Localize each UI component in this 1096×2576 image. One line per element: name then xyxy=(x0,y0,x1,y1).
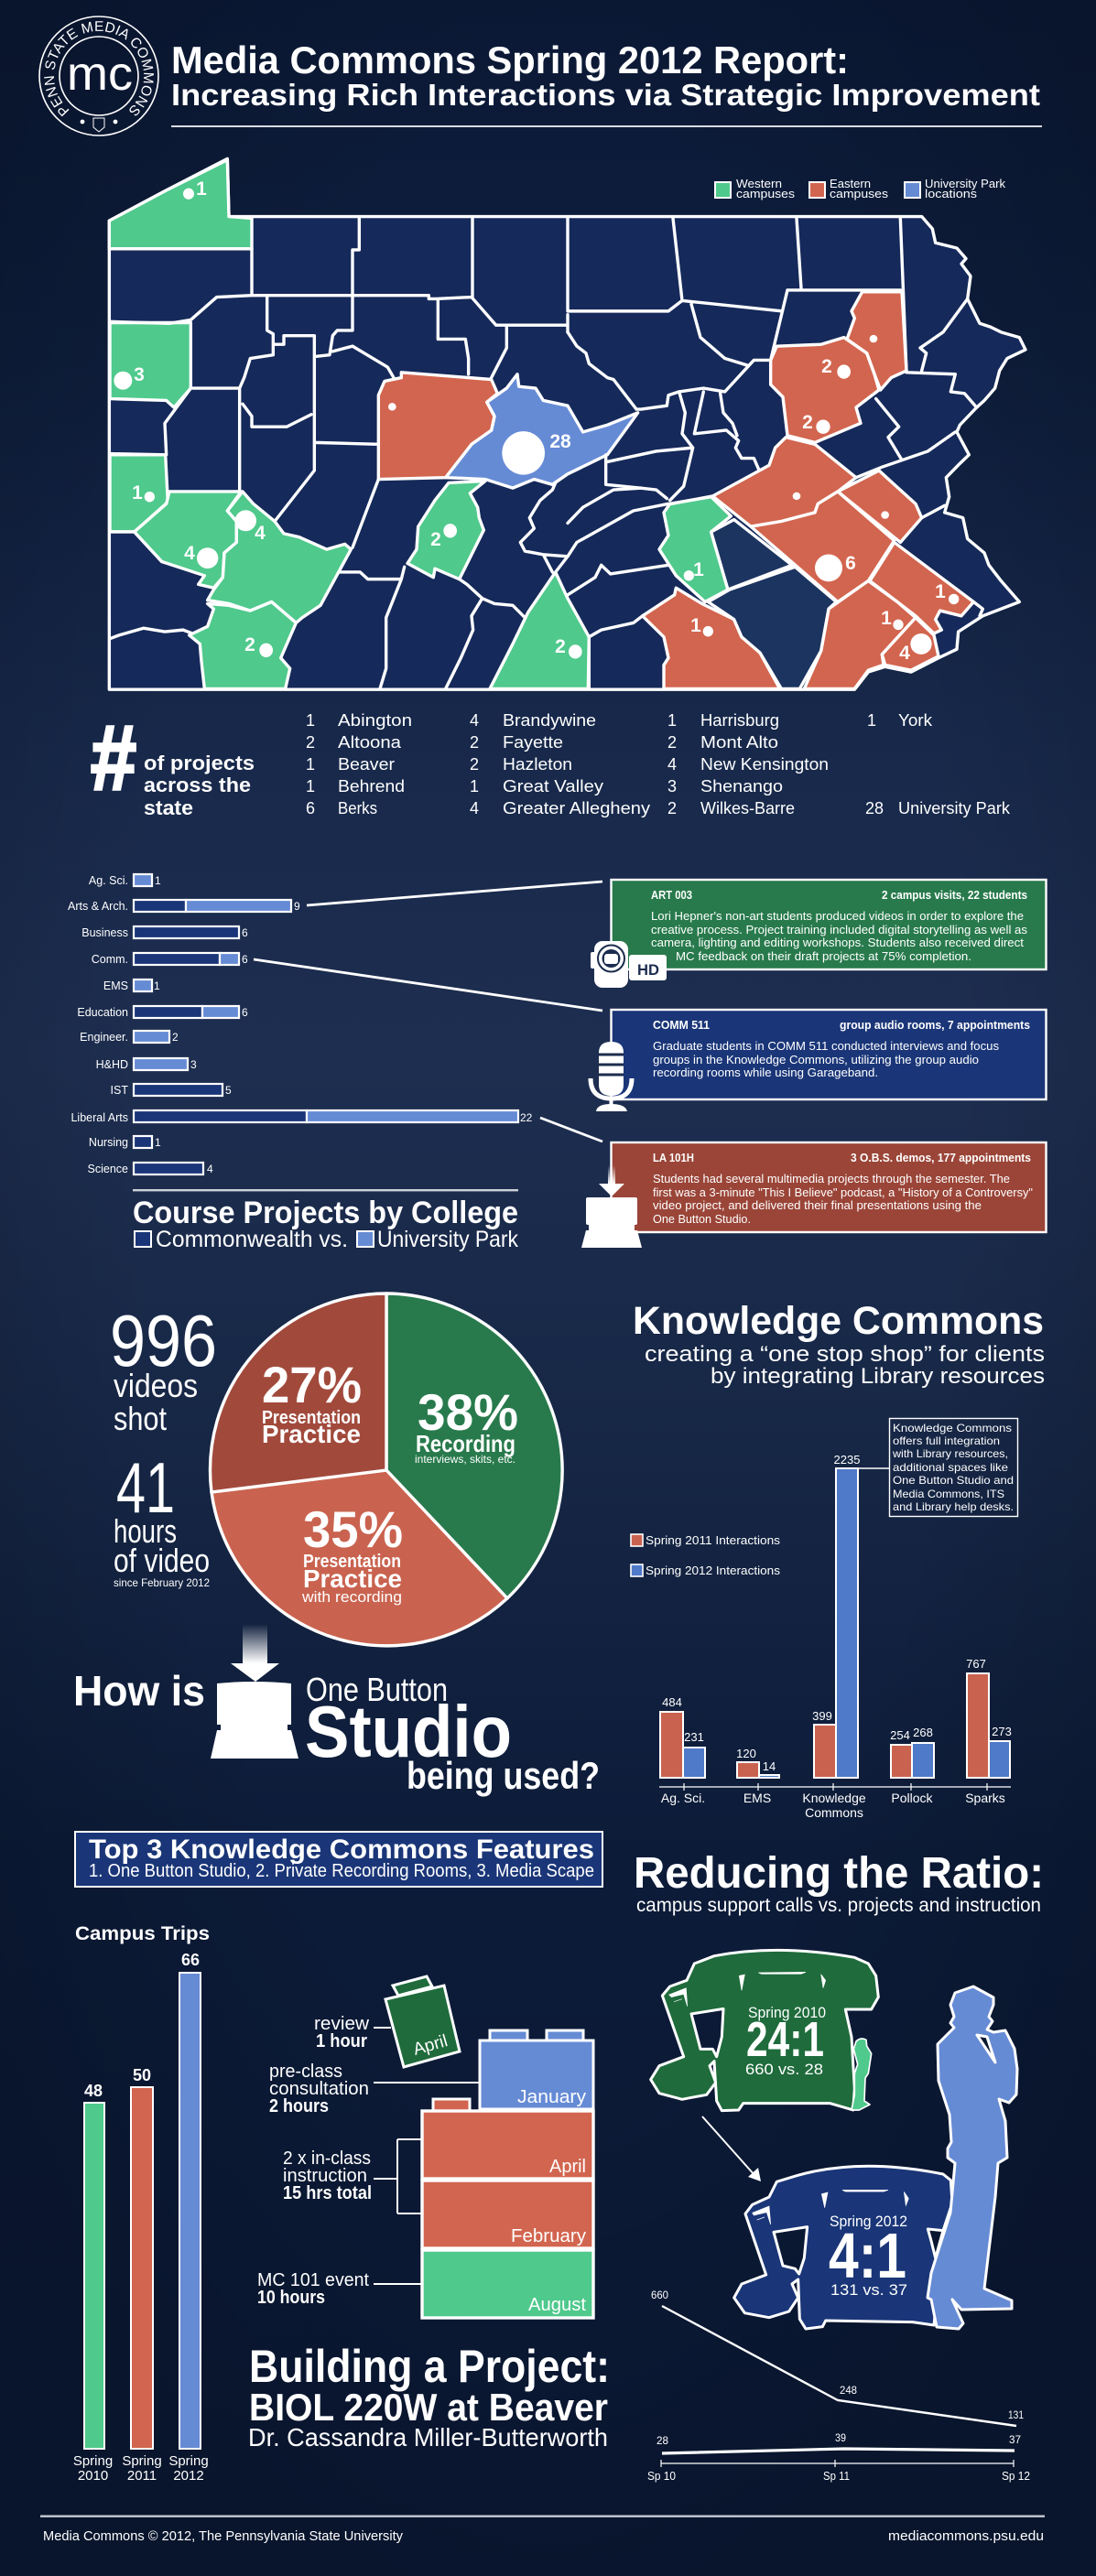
map project counts: 6 xyxy=(845,553,856,574)
panel: COMM 511: groups in the Knowledge Commons, utilizing the group audio xyxy=(653,1053,979,1066)
heading: knowledge commons: Knowledge Commons xyxy=(633,1299,1044,1343)
April block: April xyxy=(549,2157,586,2177)
campus project list: Hazleton xyxy=(503,755,572,774)
heading: building a project: BIOL 220W at Beaver xyxy=(249,2386,608,2429)
panel: COMM 511 xyxy=(612,1010,1046,1099)
diagram: project building blocks xyxy=(257,1976,593,2318)
bar chart: course projects by college: 2 xyxy=(172,1031,179,1044)
panel: ART 003: 2 campus visits, 22 students xyxy=(882,888,1027,902)
map project counts: 2 xyxy=(821,356,832,377)
heading: knowledge commons: creating a “one stop shop” for clients xyxy=(645,1342,1045,1367)
icon: Spring 2012 telephone: 131 vs. 37 xyxy=(830,2281,907,2299)
chart: campus trips: 66 xyxy=(181,1951,200,1969)
campus project list: Behrend xyxy=(338,777,405,796)
bar chart: course projects by college: 6 xyxy=(242,953,248,966)
panel: COMM 511: recording rooms while using Garageband. xyxy=(653,1066,878,1079)
pie chart: one button studio usage: 27% xyxy=(262,1356,362,1413)
chart: campus trips: 2011 xyxy=(127,2468,157,2484)
stats: videos shot and hours of video: shot xyxy=(114,1400,167,1437)
bar chart: library interactions xyxy=(659,1453,1012,1820)
panel: top 3 knowledge commons features xyxy=(75,1832,602,1887)
block labels: pre-class xyxy=(269,2062,342,2082)
bar chart: course projects by college: 6 xyxy=(242,926,248,939)
callout: knowledge commons integration: Media Commons, ITS xyxy=(893,1488,1004,1500)
map legend: University Park xyxy=(925,178,1006,190)
line chart: calls vs projects and instruction: 131 xyxy=(1008,2408,1024,2421)
chart legend: interactions: Spring 2011 Interactions xyxy=(646,1534,780,1547)
icon: Spring 2010 telephone xyxy=(651,1950,878,2111)
campus project list: York xyxy=(898,711,933,730)
block labels: review xyxy=(314,2014,370,2034)
map project counts: 28 xyxy=(549,431,571,452)
campus project list: Abington xyxy=(338,711,412,730)
panel: top 3 knowledge commons features: 1. One Button Studio, 2. Private Recording Rooms, 3. Media Scape xyxy=(89,1861,594,1881)
map project counts: 1 xyxy=(132,482,143,503)
campus project list: Berks xyxy=(338,799,377,817)
bar chart: library interactions: Ag. Sci. xyxy=(661,1791,705,1805)
campus project list: 1 xyxy=(306,777,315,796)
January block xyxy=(480,2030,593,2109)
map legend: Western xyxy=(736,178,782,190)
block labels: 2 hours xyxy=(269,2096,329,2116)
callout: knowledge commons integration: additional spaces like xyxy=(893,1461,1008,1474)
chart: campus trips: Spring xyxy=(122,2453,162,2469)
campus project list: Brandywine xyxy=(503,711,596,730)
campus project list: 4 xyxy=(470,711,479,730)
pie chart: one button studio usage xyxy=(211,1293,562,1646)
campus project list: 2 xyxy=(470,755,479,774)
bar chart: course projects by college: Engineer. xyxy=(80,1031,128,1044)
callout: knowledge commons integration: with Library resources, xyxy=(892,1447,1008,1460)
bar chart: course projects by college: Nursing xyxy=(89,1136,128,1149)
callout: knowledge commons integration: offers full integration xyxy=(893,1434,1000,1447)
bar chart: library interactions: EMS xyxy=(743,1791,771,1805)
pie chart: one button studio usage: Recording xyxy=(416,1430,515,1457)
stats: videos shot and hours of video: videos xyxy=(114,1367,198,1404)
map project counts: 2 xyxy=(244,634,255,655)
icon: Spring 2012 telephone: Spring 2012 xyxy=(830,2213,907,2230)
bar chart: library interactions: 484 xyxy=(662,1695,682,1709)
bar chart: library interactions: 120 xyxy=(736,1747,756,1760)
heading: building a project xyxy=(248,2341,610,2452)
eastern county lines xyxy=(568,218,982,688)
icon: Spring 2012 telephone: 4:1 xyxy=(829,2220,906,2291)
stats: videos shot and hours of video: since February 2012 xyxy=(114,1576,210,1589)
map: Pennsylvania counties with project counts xyxy=(109,158,1025,689)
callout: knowledge commons integration: One Button Studio and xyxy=(893,1474,1014,1487)
map project counts: 4 xyxy=(255,523,266,544)
icon: one button studio small xyxy=(581,1165,642,1248)
callout: knowledge commons integration: Knowledge Commons xyxy=(893,1422,1012,1434)
bar chart: course projects by college: 1 xyxy=(155,874,161,887)
footer: Media Commons © 2012, The Pennsylvania State University xyxy=(43,2528,403,2544)
block labels: instruction xyxy=(283,2166,367,2186)
bar chart: library interactions: 14 xyxy=(763,1759,776,1773)
map project counts: 1 xyxy=(935,581,946,602)
bar chart: course projects by college: IST xyxy=(111,1084,128,1097)
line chart: calls vs projects and instruction: Sp 12 xyxy=(1002,2469,1030,2483)
logo: Penn State Media Commons seal: PENN STATE MEDIA COMMONS xyxy=(44,21,154,117)
bar chart: course projects by college: Science xyxy=(88,1163,128,1175)
pie chart: one button studio usage: Presentation xyxy=(303,1552,401,1572)
line chart: calls vs projects and instruction: 39 xyxy=(835,2431,846,2444)
Behrend-side eastern county xyxy=(378,373,497,480)
pie chart: one button studio usage: Practice xyxy=(303,1564,402,1593)
bar chart: course projects by college: Liberal Arts xyxy=(71,1111,128,1124)
line chart: calls vs projects and instruction xyxy=(647,2289,1030,2483)
bar chart: course projects by college: 6 xyxy=(242,1006,248,1019)
stats: videos shot and hours of video xyxy=(110,1300,217,1589)
bar chart: library interactions: 767 xyxy=(966,1657,986,1671)
campus project list: 28 xyxy=(865,799,884,817)
campus project list: New Kensington xyxy=(700,755,829,774)
panel: COMM 511: COMM 511 xyxy=(653,1018,710,1032)
pie chart: one button studio usage: interviews, skits, etc. xyxy=(415,1453,515,1466)
bar chart: course projects by college: 5 xyxy=(225,1084,232,1097)
bar chart: course projects by college: 1 xyxy=(154,980,160,992)
chart: campus trips: Spring xyxy=(73,2453,113,2469)
state outline xyxy=(109,158,1025,689)
icon: small person silhouette xyxy=(852,2039,872,2110)
campus markers xyxy=(114,189,959,659)
bar chart: library interactions: 399 xyxy=(812,1709,832,1723)
campus project list: Wilkes-Barre xyxy=(700,799,795,817)
pie chart: one button studio usage: Presentation xyxy=(262,1408,361,1428)
heading: building a project: Dr. Cassandra Miller-Butterworth xyxy=(248,2423,608,2452)
bar chart: course projects by college: 22 xyxy=(520,1111,533,1124)
bar chart: library interactions: Knowledge xyxy=(802,1791,866,1805)
panel: LA 101H: LA 101H xyxy=(653,1151,694,1164)
line chart: calls vs projects and instruction: Sp 11 xyxy=(823,2469,850,2483)
callout: knowledge commons integration xyxy=(856,1419,1018,1516)
campus project list: 2 xyxy=(306,733,315,752)
map project counts: 4 xyxy=(184,543,195,564)
panel: ART 003: camera, lighting and editing workshops. Students also received direct xyxy=(651,936,1024,949)
heading: # of projects across the state: state xyxy=(144,796,193,819)
chart: campus trips: Campus Trips xyxy=(75,1923,210,1944)
map legend xyxy=(715,178,1006,200)
heading: how is one button studio being used: How is xyxy=(73,1667,205,1715)
April review block xyxy=(385,1976,460,2067)
heading: course projects by college xyxy=(133,1189,518,1252)
bar chart: course projects by college: Business xyxy=(81,926,128,939)
line chart: calls vs projects and instruction: 37 xyxy=(1009,2433,1021,2446)
panel: ART 003 xyxy=(612,880,1046,969)
bar chart: course projects by college: 3 xyxy=(190,1058,197,1071)
panel: COMM 511: group audio rooms, 7 appointments xyxy=(840,1018,1030,1032)
heading: course projects by college: Course Projects by College xyxy=(133,1196,518,1230)
bar chart: library interactions: 231 xyxy=(684,1730,704,1744)
heading: # of projects across the state: of projects xyxy=(144,752,255,774)
icon: Spring 2012 telephone xyxy=(734,2166,952,2329)
heading: how is one button studio being used xyxy=(73,1624,600,1797)
icon: HD camera: HD xyxy=(637,961,659,979)
map project counts: 2 xyxy=(802,412,813,433)
campus project list: Greater Allegheny xyxy=(503,799,650,817)
campus project list: University Park xyxy=(898,799,1011,817)
chart: campus trips: 48 xyxy=(84,2082,103,2100)
heading: how is one button studio being used: One Button xyxy=(306,1671,448,1708)
block labels xyxy=(257,2014,479,2308)
map legend: Eastern xyxy=(830,178,871,190)
campus project list: Shenango xyxy=(700,777,783,796)
chart: campus trips xyxy=(73,1923,210,2484)
footer: mediacommons.psu.edu xyxy=(888,2528,1044,2544)
map project counts: 2 xyxy=(430,529,441,550)
map project counts xyxy=(132,179,946,664)
panel: LA 101H xyxy=(612,1142,1046,1232)
heading: # of projects across the state: across the xyxy=(144,774,251,796)
panel: LA 101H: first was a 3-minute "This I Believe" podcast, a "History of a Controversy" xyxy=(653,1185,1033,1199)
campus project list: Altoona xyxy=(338,733,402,752)
block labels: 10 hours xyxy=(257,2288,325,2308)
map project counts: 1 xyxy=(693,559,704,580)
bar chart: course projects by college: Arts & Arch. xyxy=(68,900,128,913)
campus project list: 6 xyxy=(306,799,315,817)
bar chart: course projects by college: H&HD xyxy=(96,1058,128,1071)
campus project list: 1 xyxy=(306,755,315,774)
campus project list: Beaver xyxy=(338,755,395,774)
map project counts: 2 xyxy=(555,636,566,657)
western campus counties xyxy=(109,160,589,688)
line chart: calls vs projects and instruction: 28 xyxy=(657,2434,668,2447)
heading: knowledge commons: by integrating Library resources xyxy=(711,1364,1045,1389)
Cumberland area county xyxy=(659,497,731,602)
title: Increasing Rich Interactions via Strategic Improvement xyxy=(171,78,1040,112)
panel: ART 003: ART 003 xyxy=(651,888,692,902)
heading: how is one button studio being used: being used? xyxy=(407,1754,600,1797)
title: Media Commons Spring 2012 Report: xyxy=(171,38,849,81)
January block: January xyxy=(517,2087,586,2107)
western county lines xyxy=(110,218,568,688)
University Park county xyxy=(446,374,638,488)
campus project list: 4 xyxy=(667,755,677,774)
bar chart: course projects by college: Ag. Sci. xyxy=(89,874,128,887)
heading: building a project: Building a Project: xyxy=(249,2341,610,2392)
arrow between telephones xyxy=(702,2116,761,2181)
bar chart: course projects by college: Education xyxy=(77,1006,128,1019)
map project counts: 4 xyxy=(899,643,910,664)
stats: videos shot and hours of video: 996 xyxy=(110,1300,217,1381)
April review block: April xyxy=(411,2031,450,2060)
bar chart: library interactions: 268 xyxy=(913,1726,933,1739)
icon: Spring 2010 telephone: Spring 2010 xyxy=(748,2004,826,2021)
campus project list xyxy=(306,711,1011,817)
block labels: MC 101 event xyxy=(257,2270,369,2290)
February block xyxy=(422,2181,593,2248)
chart legend: interactions: Spring 2012 Interactions xyxy=(646,1564,780,1577)
campus project list: 2 xyxy=(470,733,479,752)
April block xyxy=(422,2099,593,2179)
campus project list: Harrisburg xyxy=(700,711,779,730)
bar chart: course projects by college xyxy=(68,874,533,1175)
heading: reducing the ratio: campus support calls vs. projects and instruction xyxy=(636,1895,1041,1916)
panel: LA 101H: video project, and delivered their final presentations using the xyxy=(653,1198,982,1212)
stats: videos shot and hours of video: hours xyxy=(114,1512,177,1550)
icon: HD camera xyxy=(591,941,667,988)
callout: knowledge commons integration: and Library help desks. xyxy=(893,1500,1014,1513)
stats: videos shot and hours of video: 41 xyxy=(116,1447,175,1528)
heading: reducing the ratio: Reducing the Ratio: xyxy=(634,1849,1044,1898)
line chart: calls vs projects and instruction: Sp 10 xyxy=(647,2469,676,2483)
heading: knowledge commons xyxy=(633,1299,1045,1389)
bar chart: course projects by college: 1 xyxy=(155,1136,161,1149)
panel: COMM 511: Graduate students in COMM 511 conducted interviews and focus xyxy=(653,1039,999,1053)
title xyxy=(171,38,1042,127)
panel: LA 101H: 3 O.B.S. demos, 177 appointments xyxy=(851,1151,1031,1164)
campus project list: Mont Alto xyxy=(700,733,778,752)
stats: videos shot and hours of video: of video xyxy=(114,1542,210,1579)
bar chart: library interactions: Pollock xyxy=(891,1791,934,1805)
icon: large person silhouette xyxy=(928,1986,1017,2329)
chart: campus trips: 2010 xyxy=(78,2468,108,2484)
pie chart: one button studio usage: 38% xyxy=(418,1383,518,1441)
heading: how is one button studio being used: Studio xyxy=(305,1691,512,1772)
bar chart: course projects by college: 4 xyxy=(207,1163,213,1175)
heading: # of projects across the state: # xyxy=(91,707,136,809)
icon: Spring 2010 telephone: 24:1 xyxy=(746,2012,824,2067)
pie chart: one button studio usage: with recording xyxy=(301,1588,402,1606)
campus project list: 2 xyxy=(667,733,677,752)
chart legend: interactions xyxy=(631,1534,780,1577)
panel: ART 003: MC feedback on their draft projects at 75% completion. xyxy=(676,949,971,963)
bar chart: library interactions: 2235 xyxy=(834,1453,860,1467)
bar chart: course projects by college: 9 xyxy=(294,900,300,913)
map project counts: 1 xyxy=(881,608,892,629)
map legend: campuses xyxy=(736,188,795,200)
August block xyxy=(422,2250,593,2318)
pie chart: one button studio usage: 35% xyxy=(303,1500,403,1558)
panel: LA 101H: Students had several multimedia projects through the semester. The xyxy=(653,1172,1010,1185)
campus project list: Great Valley xyxy=(503,777,603,796)
panel: LA 101H: One Button Studio. xyxy=(653,1212,751,1226)
map legend: campuses xyxy=(830,188,888,200)
map legend: locations xyxy=(925,188,977,200)
icon: Spring 2010 telephone: 660 vs. 28 xyxy=(745,2061,823,2078)
campus project list: 1 xyxy=(306,711,315,730)
panel: ART 003: creative process. Project training included digital storytelling as well as xyxy=(651,923,1028,936)
icon: microphone xyxy=(591,1042,632,1111)
bar chart: library interactions: 273 xyxy=(992,1725,1012,1738)
lighter southern counties xyxy=(708,520,836,688)
August block: August xyxy=(528,2295,586,2315)
map project counts: 3 xyxy=(134,364,145,385)
map project counts: 1 xyxy=(196,179,207,200)
line chart: calls vs projects and instruction: 248 xyxy=(840,2384,857,2397)
block labels: 15 hrs total xyxy=(283,2183,372,2203)
eastern campus counties xyxy=(643,292,973,688)
footer xyxy=(40,2516,1045,2544)
pie chart: one button studio usage: Practice xyxy=(262,1420,361,1448)
chart: campus trips: 2012 xyxy=(173,2468,204,2484)
block labels: consultation xyxy=(269,2079,369,2099)
campus project list: 2 xyxy=(667,799,677,817)
logo: Penn State Media Commons seal: mc xyxy=(67,48,133,101)
heading: # of projects across the state xyxy=(91,707,255,819)
heading: course projects by college: Commonwealth vs. xyxy=(156,1227,348,1252)
campus project list: 3 xyxy=(667,777,677,796)
panel: ART 003: Lori Hepner's non-art students produced videos in order to explore the xyxy=(651,909,1024,923)
chart: campus trips: 50 xyxy=(133,2066,151,2084)
bar chart: library interactions: 254 xyxy=(890,1728,910,1742)
campus project list: 1 xyxy=(470,777,479,796)
panel: top 3 knowledge commons features: Top 3 Knowledge Commons Features xyxy=(89,1835,594,1865)
block labels: 1 hour xyxy=(316,2031,367,2051)
bar chart: course projects by college: EMS xyxy=(103,980,128,992)
bar chart: course projects by college: Comm. xyxy=(92,953,128,966)
block labels: 2 x in-class xyxy=(283,2148,371,2169)
heading: course projects by college: University Park xyxy=(377,1227,518,1252)
February block: February xyxy=(511,2226,586,2246)
campus project list: 1 xyxy=(867,711,876,730)
chart: campus trips: Spring xyxy=(168,2453,209,2469)
connector lines from bars to case studies xyxy=(254,882,602,1142)
line chart: calls vs projects and instruction: 660 xyxy=(651,2289,668,2301)
campus project list: 1 xyxy=(667,711,677,730)
bar chart: library interactions: Commons xyxy=(805,1805,863,1820)
map project counts: 1 xyxy=(690,615,701,636)
campus project list: 4 xyxy=(470,799,479,817)
campus project list: Fayette xyxy=(503,733,563,752)
bar chart: library interactions: Sparks xyxy=(965,1791,1005,1805)
